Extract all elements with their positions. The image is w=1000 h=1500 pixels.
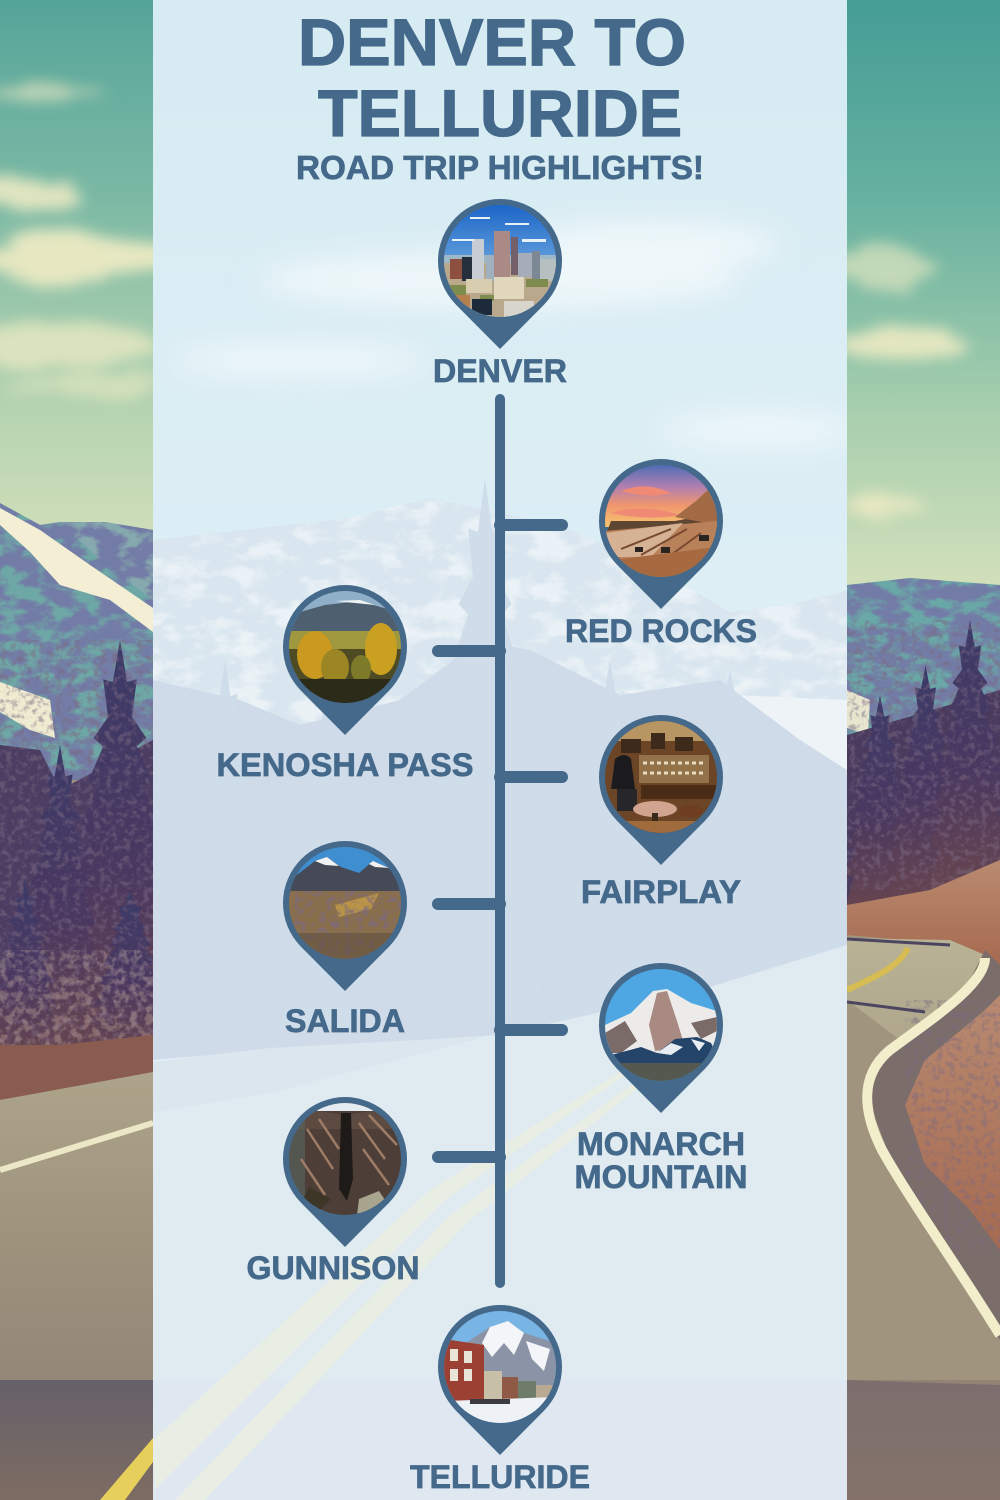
tree texture <box>0 640 153 1070</box>
pin marker <box>438 199 562 349</box>
photo: Salida valley town <box>289 847 401 959</box>
stop: Telluride <box>410 1305 590 1495</box>
road shade bottom <box>0 1380 1000 1500</box>
mountains left and right <box>0 490 1000 780</box>
yellow centre lines <box>847 948 908 990</box>
faded bottom band <box>153 1380 847 1500</box>
title <box>296 5 704 186</box>
photo: Red Rocks amphitheatre <box>605 465 717 577</box>
stop: Salida <box>283 841 407 1039</box>
label: two lines <box>574 1126 748 1195</box>
pin marker <box>283 585 407 735</box>
timeline <box>438 399 562 1283</box>
panel sky <box>153 0 847 1093</box>
photo: Kenosha Pass aspens <box>289 591 401 703</box>
branch: Red Rocks <box>500 519 562 531</box>
branch: Monarch Mountain <box>500 1024 562 1036</box>
pin marker <box>599 715 723 865</box>
stop: Denver <box>433 199 567 389</box>
road shadow lines <box>847 939 950 1012</box>
label: TELLURIDE <box>410 1459 590 1495</box>
translucent central panel <box>153 0 860 1500</box>
photo: Telluride main street <box>444 1311 556 1423</box>
stop: Kenosha Pass <box>216 585 474 783</box>
road below white line <box>847 1000 1000 1500</box>
road base <box>0 640 1000 1500</box>
pin marker <box>438 1305 562 1455</box>
white edge line right <box>867 958 1000 1335</box>
photo: Monarch Mountain peak <box>605 969 717 1081</box>
branch: Salida <box>438 898 500 910</box>
road surface <box>0 938 1000 1500</box>
label: two lines: MONARCH <box>577 1126 745 1162</box>
pin marker <box>283 1097 407 1247</box>
photo: Black Canyon near Gunnison <box>289 1103 401 1215</box>
heading line: Denver to: DENVER TO <box>298 5 686 79</box>
label: RED ROCKS <box>565 613 757 649</box>
label: DENVER <box>433 353 567 389</box>
faded mountain <box>153 499 847 725</box>
branch: Fairplay <box>500 771 562 783</box>
photo: Fairplay saloon interior <box>605 721 717 833</box>
clouds <box>0 84 965 514</box>
dark forest <box>0 740 153 1060</box>
faded road <box>567 945 847 1020</box>
dirt verge right <box>905 995 1000 1250</box>
branch: Gunnison <box>438 1151 500 1163</box>
left sky wash <box>0 0 153 640</box>
faded forest <box>153 640 847 1060</box>
photo: Denver skyline <box>444 205 556 317</box>
road shoulder right <box>868 950 1000 1340</box>
label: GUNNISON <box>246 1250 420 1286</box>
hillside right <box>847 860 1000 965</box>
white edge line left <box>0 1123 153 1170</box>
faded snowfield <box>620 690 847 770</box>
pin marker <box>599 963 723 1113</box>
label: KENOSHA PASS <box>216 747 474 783</box>
pin marker <box>599 459 723 609</box>
hillside left verge <box>0 1035 153 1100</box>
stop: Fairplay <box>581 715 741 910</box>
subtitle: ROAD TRIP HIGHLIGHTS! <box>296 149 704 186</box>
sky <box>0 0 1000 640</box>
faded conifers <box>180 478 850 1030</box>
label: two lines: MOUNTAIN <box>574 1159 748 1195</box>
conifer trees <box>0 620 1000 1060</box>
pin marker <box>283 841 407 991</box>
heading line: Telluride: TELLURIDE <box>318 76 682 150</box>
faded centre lines <box>153 1072 655 1500</box>
stop: Red Rocks <box>565 459 757 649</box>
stop: Monarch Mountain <box>574 963 748 1195</box>
stop: Gunnison <box>246 1097 420 1286</box>
spine <box>495 399 505 1283</box>
branch: Kenosha Pass <box>438 645 500 657</box>
label: FAIRPLAY <box>581 874 741 910</box>
panel clouds <box>170 221 860 446</box>
label: SALIDA <box>285 1003 405 1039</box>
